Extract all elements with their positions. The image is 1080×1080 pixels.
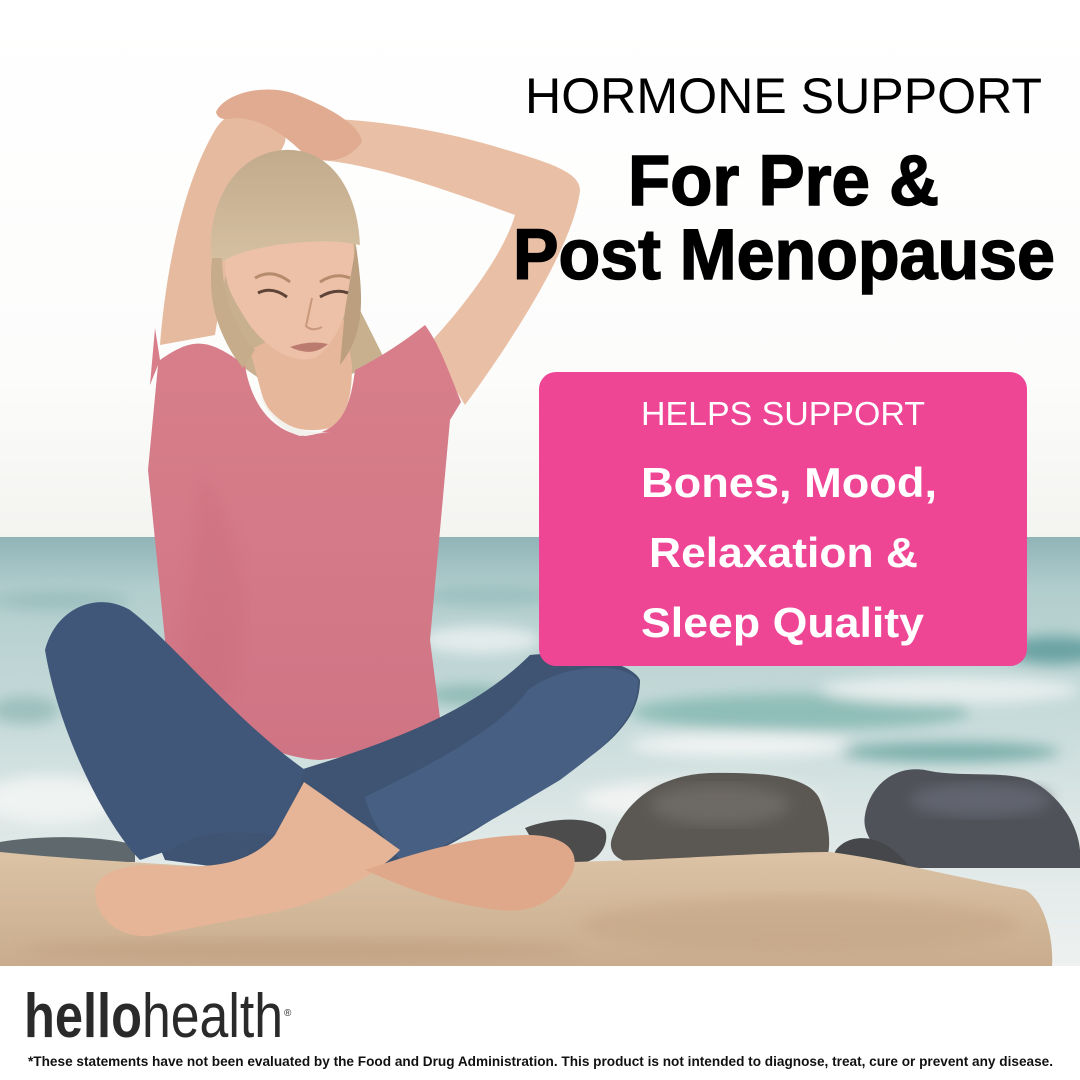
photo background: sky <box>0 0 1080 540</box>
foot <box>365 835 575 911</box>
logo: hellohealth: health <box>142 982 283 1051</box>
raised left arm <box>160 109 286 345</box>
left leg <box>45 602 305 860</box>
benefit line 2: Relaxation & <box>649 529 918 576</box>
sand slab <box>0 852 1052 966</box>
logo: hellohealth: hello <box>24 982 142 1051</box>
hair back <box>210 230 385 400</box>
heading line: post menopause: Post Menopause <box>513 216 1055 295</box>
shirt <box>148 325 461 760</box>
disclaimer: *These statements have not been evaluated by the Food and Drug Administration. This product is not intended to diagnose, treat, cure or prevent any disease. <box>28 1054 1053 1069</box>
panel: helps support <box>539 372 1027 666</box>
heading line: for pre: For Pre & <box>628 142 939 221</box>
neck and chest <box>250 320 352 430</box>
raised right arm <box>289 119 580 405</box>
hand <box>216 89 362 161</box>
benefit line 1: Bones, Mood, <box>641 459 937 506</box>
benefit line 3: Sleep Quality <box>641 599 925 646</box>
face <box>225 192 354 359</box>
photo background: sea <box>0 537 1080 966</box>
heading line: hormone support: HORMONE SUPPORT <box>525 68 1042 124</box>
eyes <box>258 290 348 297</box>
shin right <box>365 668 638 864</box>
left calf skin <box>95 782 400 936</box>
hair top <box>211 150 360 262</box>
logo: hellohealth <box>24 982 292 1051</box>
nose and mouth <box>306 298 322 329</box>
legs: back thigh right <box>140 654 640 870</box>
heading <box>513 68 1055 295</box>
footer band <box>0 966 1080 1080</box>
logo: hellohealth: ® <box>284 1008 292 1019</box>
rocks <box>0 769 1080 868</box>
panel heading: HELPS SUPPORT <box>641 395 925 432</box>
woman in pose <box>45 89 640 936</box>
